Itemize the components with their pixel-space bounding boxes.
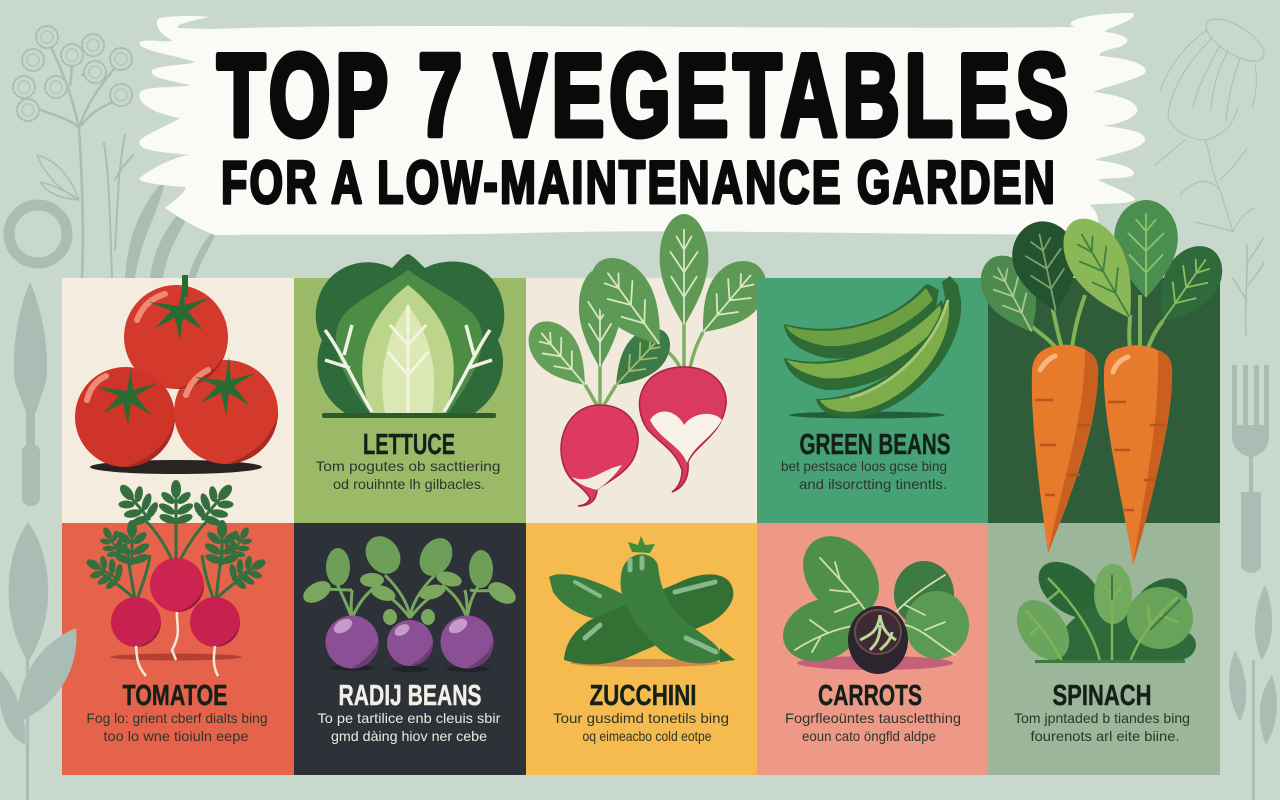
decorative garden line art, left (0, 26, 220, 800)
icon: crossed zucchini (549, 536, 735, 667)
icon: bottom-right leaves (1229, 585, 1277, 800)
panel: radish (518, 214, 779, 523)
panel: tomatoes (62, 275, 294, 523)
description: tomatoe (86, 710, 268, 744)
label: spinach: SPINACH (1052, 680, 1152, 712)
icon: garden fork (1232, 365, 1269, 573)
description: green beans (781, 458, 947, 492)
icon: bottom-left leaves (0, 522, 48, 800)
icon: tomato pile (75, 275, 278, 474)
icon: leaf overlapping the red panel (18, 628, 77, 722)
description: tomatoe: too lo wne tioiuln eepe (104, 728, 249, 744)
description: zucchini: Tour gusdimd tonetils bing (553, 710, 729, 726)
description: carrots: Fogrfleoüntes tauscletthing (785, 710, 961, 726)
description: tomatoe: Fog lo: grient cberf dialts bing (86, 710, 268, 726)
description: radij beans (318, 710, 501, 744)
description: spinach: fourenots arl eite biine. (1030, 728, 1180, 744)
icon: sketched whisk (1155, 11, 1270, 232)
icon: radishes with leaves (518, 214, 779, 506)
icon: two carrots with leafy tops (970, 200, 1234, 565)
description: radij beans: To pe tartilice enb cleuis sbir (318, 710, 501, 726)
description: spinach (1014, 710, 1190, 744)
icon: lettuce head (316, 254, 504, 418)
label: zucchini: ZUCCHINI (590, 680, 696, 712)
description: spinach: Tom jpntaded b tiandes bing (1014, 710, 1190, 726)
panel: tomatoe (62, 473, 294, 775)
panel: spinach (988, 523, 1220, 775)
icon: ring (9, 205, 67, 263)
description: carrots (785, 710, 961, 744)
icon: spinach bunch (1006, 550, 1196, 670)
description: lettuce (316, 458, 500, 492)
panel: lettuce (294, 254, 526, 523)
icon: pile of green beans (784, 276, 961, 418)
icon: three red radishes (79, 473, 273, 676)
description: zucchini: oq eimeacbo cold eotpe (582, 728, 712, 744)
label: lettuce: LETTUCE (363, 429, 455, 461)
description: carrots: eoun cato öngfld aldpe (802, 728, 936, 744)
icon: tall grass leaves (125, 178, 220, 278)
title banner (139, 13, 1146, 235)
icon: thin herb branch (1232, 238, 1264, 335)
description: green beans: and ilsorctting tinentls. (799, 476, 947, 492)
description: radij beans: gmd dàing hiov ner cebe (331, 728, 487, 744)
description: lettuce: Tom pogutes ob sacttiering (316, 458, 500, 474)
decorative garden line art, right (1155, 11, 1277, 800)
icon: purple turnips (300, 529, 519, 672)
panel: carrots (top background) (988, 278, 1220, 523)
panel: zucchini (526, 523, 757, 775)
icon: trowel (14, 282, 47, 506)
panel: carrots text cell (757, 521, 988, 775)
description: lettuce: od rouihnte lh gilbacles. (333, 476, 485, 492)
icon: leafy plant in pot (774, 521, 969, 674)
label: carrots: CARROTS (818, 680, 922, 712)
description: zucchini (553, 710, 729, 744)
label: tomatoe: TOMATOE (122, 680, 228, 712)
icon: flowering herb (13, 26, 133, 278)
label: green beans: GREEN BEANS (800, 429, 950, 461)
label: radij beans: RADIJ BEANS (338, 680, 482, 712)
description: green beans: bet pestsace loos gcse bing (781, 458, 947, 474)
panel: radij beans (294, 523, 526, 775)
panel: green beans (757, 276, 988, 523)
